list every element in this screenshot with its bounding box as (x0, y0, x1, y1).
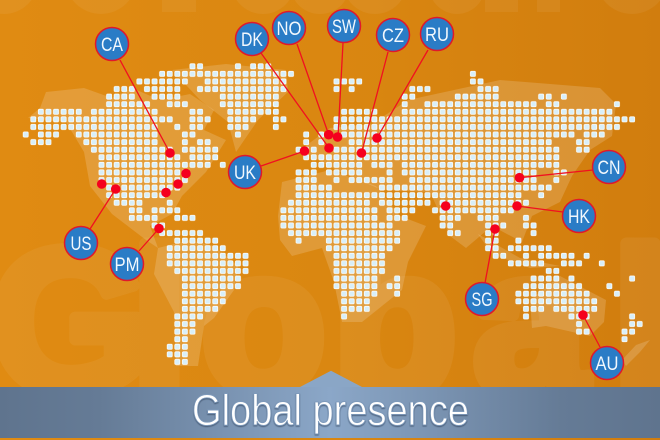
marker: UK: UK (234, 163, 256, 184)
marker: CA: CA (101, 35, 123, 56)
marker: US (64, 184, 120, 260)
marker: NO: NO (276, 19, 302, 40)
marker: AU: AU (596, 354, 618, 375)
marker: HK: HK (568, 207, 590, 228)
marker: HK (512, 200, 596, 232)
marker: AU (578, 310, 624, 380)
watermark word: Global (0, 207, 660, 436)
marker: DK (236, 22, 334, 153)
marker: SW: SW (332, 17, 356, 38)
marker: RU (372, 18, 454, 143)
marker: SW (328, 10, 360, 142)
marker: CN (515, 150, 626, 184)
dot-matrix world map (22, 66, 643, 362)
marker: SG (466, 224, 500, 316)
marker: NO (272, 12, 334, 140)
marker: US: US (70, 234, 92, 255)
marker: CZ: CZ (382, 26, 404, 47)
marker: DK: DK (241, 30, 263, 51)
marker: UK (228, 146, 309, 188)
marker: RU: RU (425, 25, 449, 46)
watermark: top letter bottoms (0, 0, 660, 14)
continents silhouette (28, 64, 650, 366)
marker: PM (110, 224, 164, 280)
title banner (0, 371, 660, 438)
marker: CN: CN (598, 158, 620, 179)
marker: SG: SG (472, 290, 492, 311)
marker: CZ (357, 18, 410, 158)
marker: PM: PM (114, 255, 140, 276)
title: Global presence (192, 386, 469, 435)
marker: CA (96, 28, 175, 158)
office dots without labels (97, 169, 451, 211)
